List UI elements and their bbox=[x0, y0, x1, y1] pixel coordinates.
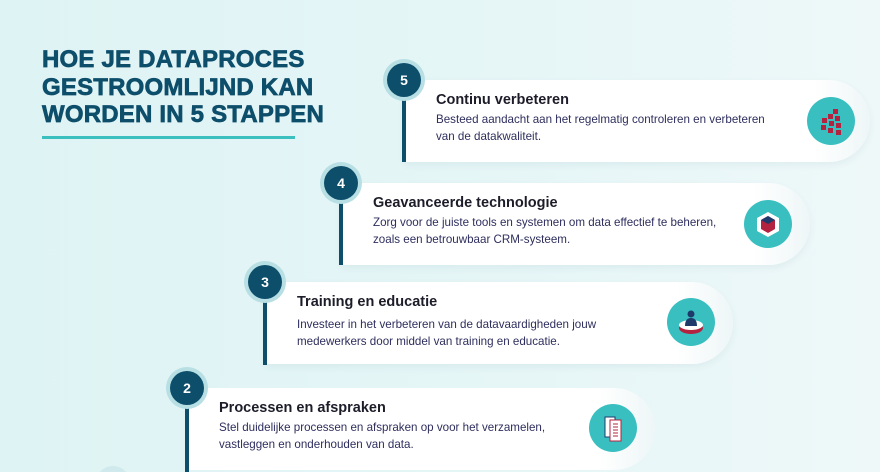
text 4: zoals een betrouwbaar CRM-systeem. bbox=[373, 233, 570, 246]
heading 3: Training en educatie bbox=[297, 294, 437, 310]
step 4 card bbox=[341, 183, 810, 265]
icon: cube bbox=[744, 200, 792, 248]
badge 5 bbox=[387, 63, 421, 97]
icon: person bbox=[667, 298, 715, 346]
text 4: Zorg voor de juiste tools en systemen om data effectief te beheren, bbox=[373, 216, 716, 229]
title bbox=[42, 46, 324, 128]
title: WORDEN IN 5 STAPPEN bbox=[42, 101, 324, 128]
text 3: Investeer in het verbeteren van de datavaardigheden jouw bbox=[297, 318, 596, 331]
title: GESTROOMLIJND KAN bbox=[42, 74, 313, 100]
icon: grid of blocks bbox=[807, 97, 855, 145]
icon: documents bbox=[589, 404, 637, 452]
text 5 bbox=[436, 113, 765, 143]
badge 2: 2 bbox=[183, 380, 191, 396]
badge 1 (partial) bbox=[100, 466, 126, 472]
text 3: medewerkers door middel van training en educatie. bbox=[297, 335, 560, 348]
heading 4: Geavanceerde technologie bbox=[373, 195, 558, 211]
text 4 bbox=[373, 216, 716, 246]
badge 5: 5 bbox=[400, 72, 408, 88]
text 2 bbox=[219, 421, 545, 451]
text 2: Stel duidelijke processen en afspraken op voor het verzamelen, bbox=[219, 421, 545, 434]
badge 3: 3 bbox=[261, 274, 269, 290]
text 3 bbox=[297, 318, 596, 348]
step 5 card bbox=[404, 80, 870, 162]
badge 4: 4 bbox=[337, 175, 345, 191]
step 2 card bbox=[187, 388, 655, 470]
text 5: Besteed aandacht aan het regelmatig controleren en verbeteren bbox=[436, 113, 765, 126]
text 2: vastleggen en onderhouden van data. bbox=[219, 438, 414, 451]
heading 5: Continu verbeteren bbox=[436, 92, 569, 108]
step 3 card bbox=[265, 282, 733, 364]
text 5: van de datakwaliteit. bbox=[436, 130, 541, 143]
badge 3 bbox=[248, 265, 282, 299]
heading 2: Processen en afspraken bbox=[219, 400, 386, 416]
badge 4 bbox=[324, 166, 358, 200]
title: HOE JE DATAPROCES bbox=[42, 46, 305, 73]
badge 2 bbox=[170, 371, 204, 405]
